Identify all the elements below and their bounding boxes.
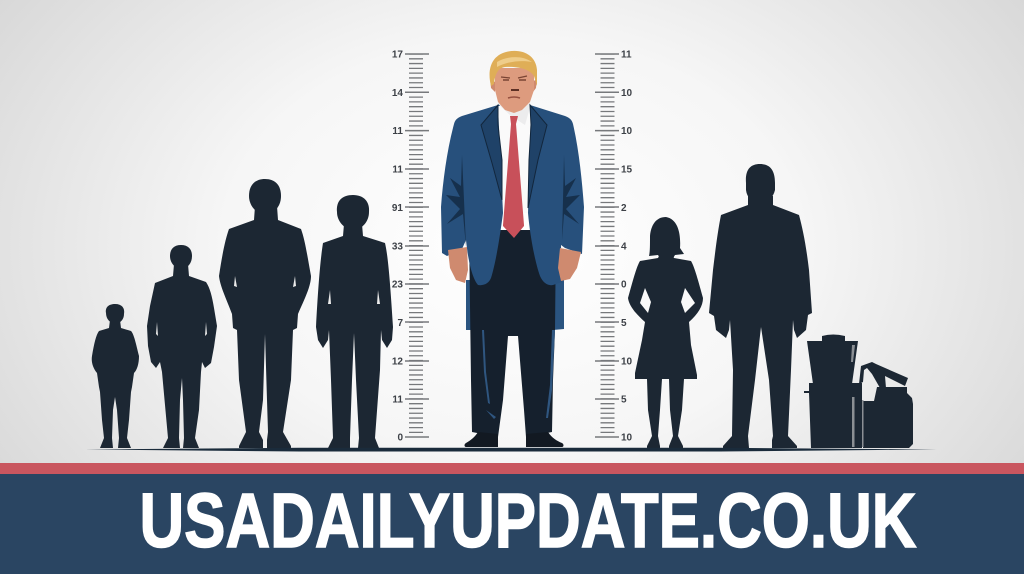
red necktie	[503, 116, 524, 238]
left height ruler: 11	[392, 394, 403, 406]
left height ruler: 11	[392, 164, 403, 176]
right height ruler	[595, 50, 633, 444]
face	[495, 68, 534, 113]
icon: blender jar	[807, 334, 858, 384]
navy footer band	[0, 474, 1024, 574]
icon: canister	[863, 387, 913, 448]
left height ruler: 0	[397, 432, 403, 444]
right height ruler: 5	[621, 318, 627, 329]
blond hair	[490, 51, 537, 86]
right height ruler: 5	[621, 394, 627, 406]
silhouette: tall man on right	[709, 164, 812, 448]
silhouette: man with short hair	[316, 195, 393, 448]
light arm gaps on left silhouettes	[156, 276, 380, 336]
coat back panels	[466, 280, 564, 330]
suit jacket	[441, 105, 584, 285]
icon: appliance base	[804, 383, 862, 448]
right height ruler: 10	[621, 88, 633, 99]
icon: tool arm	[859, 362, 908, 388]
silhouette: woman in dress	[628, 217, 703, 448]
white shirt	[498, 106, 531, 213]
trousers	[469, 230, 556, 437]
silhouette: boy in jacket	[147, 245, 217, 448]
right height ruler: 4	[621, 242, 627, 252]
jacket shadow folds	[446, 155, 580, 247]
right hand	[558, 248, 581, 281]
facial features	[501, 76, 527, 98]
left height ruler: 17	[392, 50, 403, 60]
trouser highlights	[482, 330, 555, 419]
right shoe	[526, 432, 564, 447]
right height ruler: 10	[621, 356, 633, 368]
right lapel	[528, 105, 547, 208]
right height ruler: 10	[621, 126, 633, 137]
left height ruler: 91	[392, 203, 403, 214]
right height ruler: 2	[621, 203, 627, 214]
left height ruler: 14	[392, 88, 403, 99]
left shoe	[464, 432, 498, 447]
silhouette: tall man	[219, 179, 311, 448]
silhouette: small child	[92, 304, 139, 448]
right height ruler: 10	[621, 432, 633, 444]
right height ruler: 0	[621, 280, 627, 290]
hair highlight	[497, 57, 532, 67]
ground line	[85, 448, 937, 452]
right height ruler: 11	[621, 50, 632, 60]
icon: kitchen appliance silhouette	[804, 334, 913, 448]
left height ruler: 11	[392, 126, 403, 137]
left height ruler: 7	[397, 318, 403, 329]
left hand	[448, 247, 468, 283]
figure: central man in suit	[441, 51, 584, 447]
ears	[490, 78, 537, 92]
left height ruler: 23	[392, 280, 403, 290]
highlight strip	[851, 345, 864, 447]
left height ruler: 33	[392, 242, 403, 252]
left lapel	[481, 105, 502, 200]
left height ruler: 12	[392, 356, 403, 368]
left height ruler	[392, 50, 429, 444]
red stripe	[0, 463, 1024, 474]
shirt collar	[498, 104, 531, 125]
right height ruler: 15	[621, 164, 633, 176]
